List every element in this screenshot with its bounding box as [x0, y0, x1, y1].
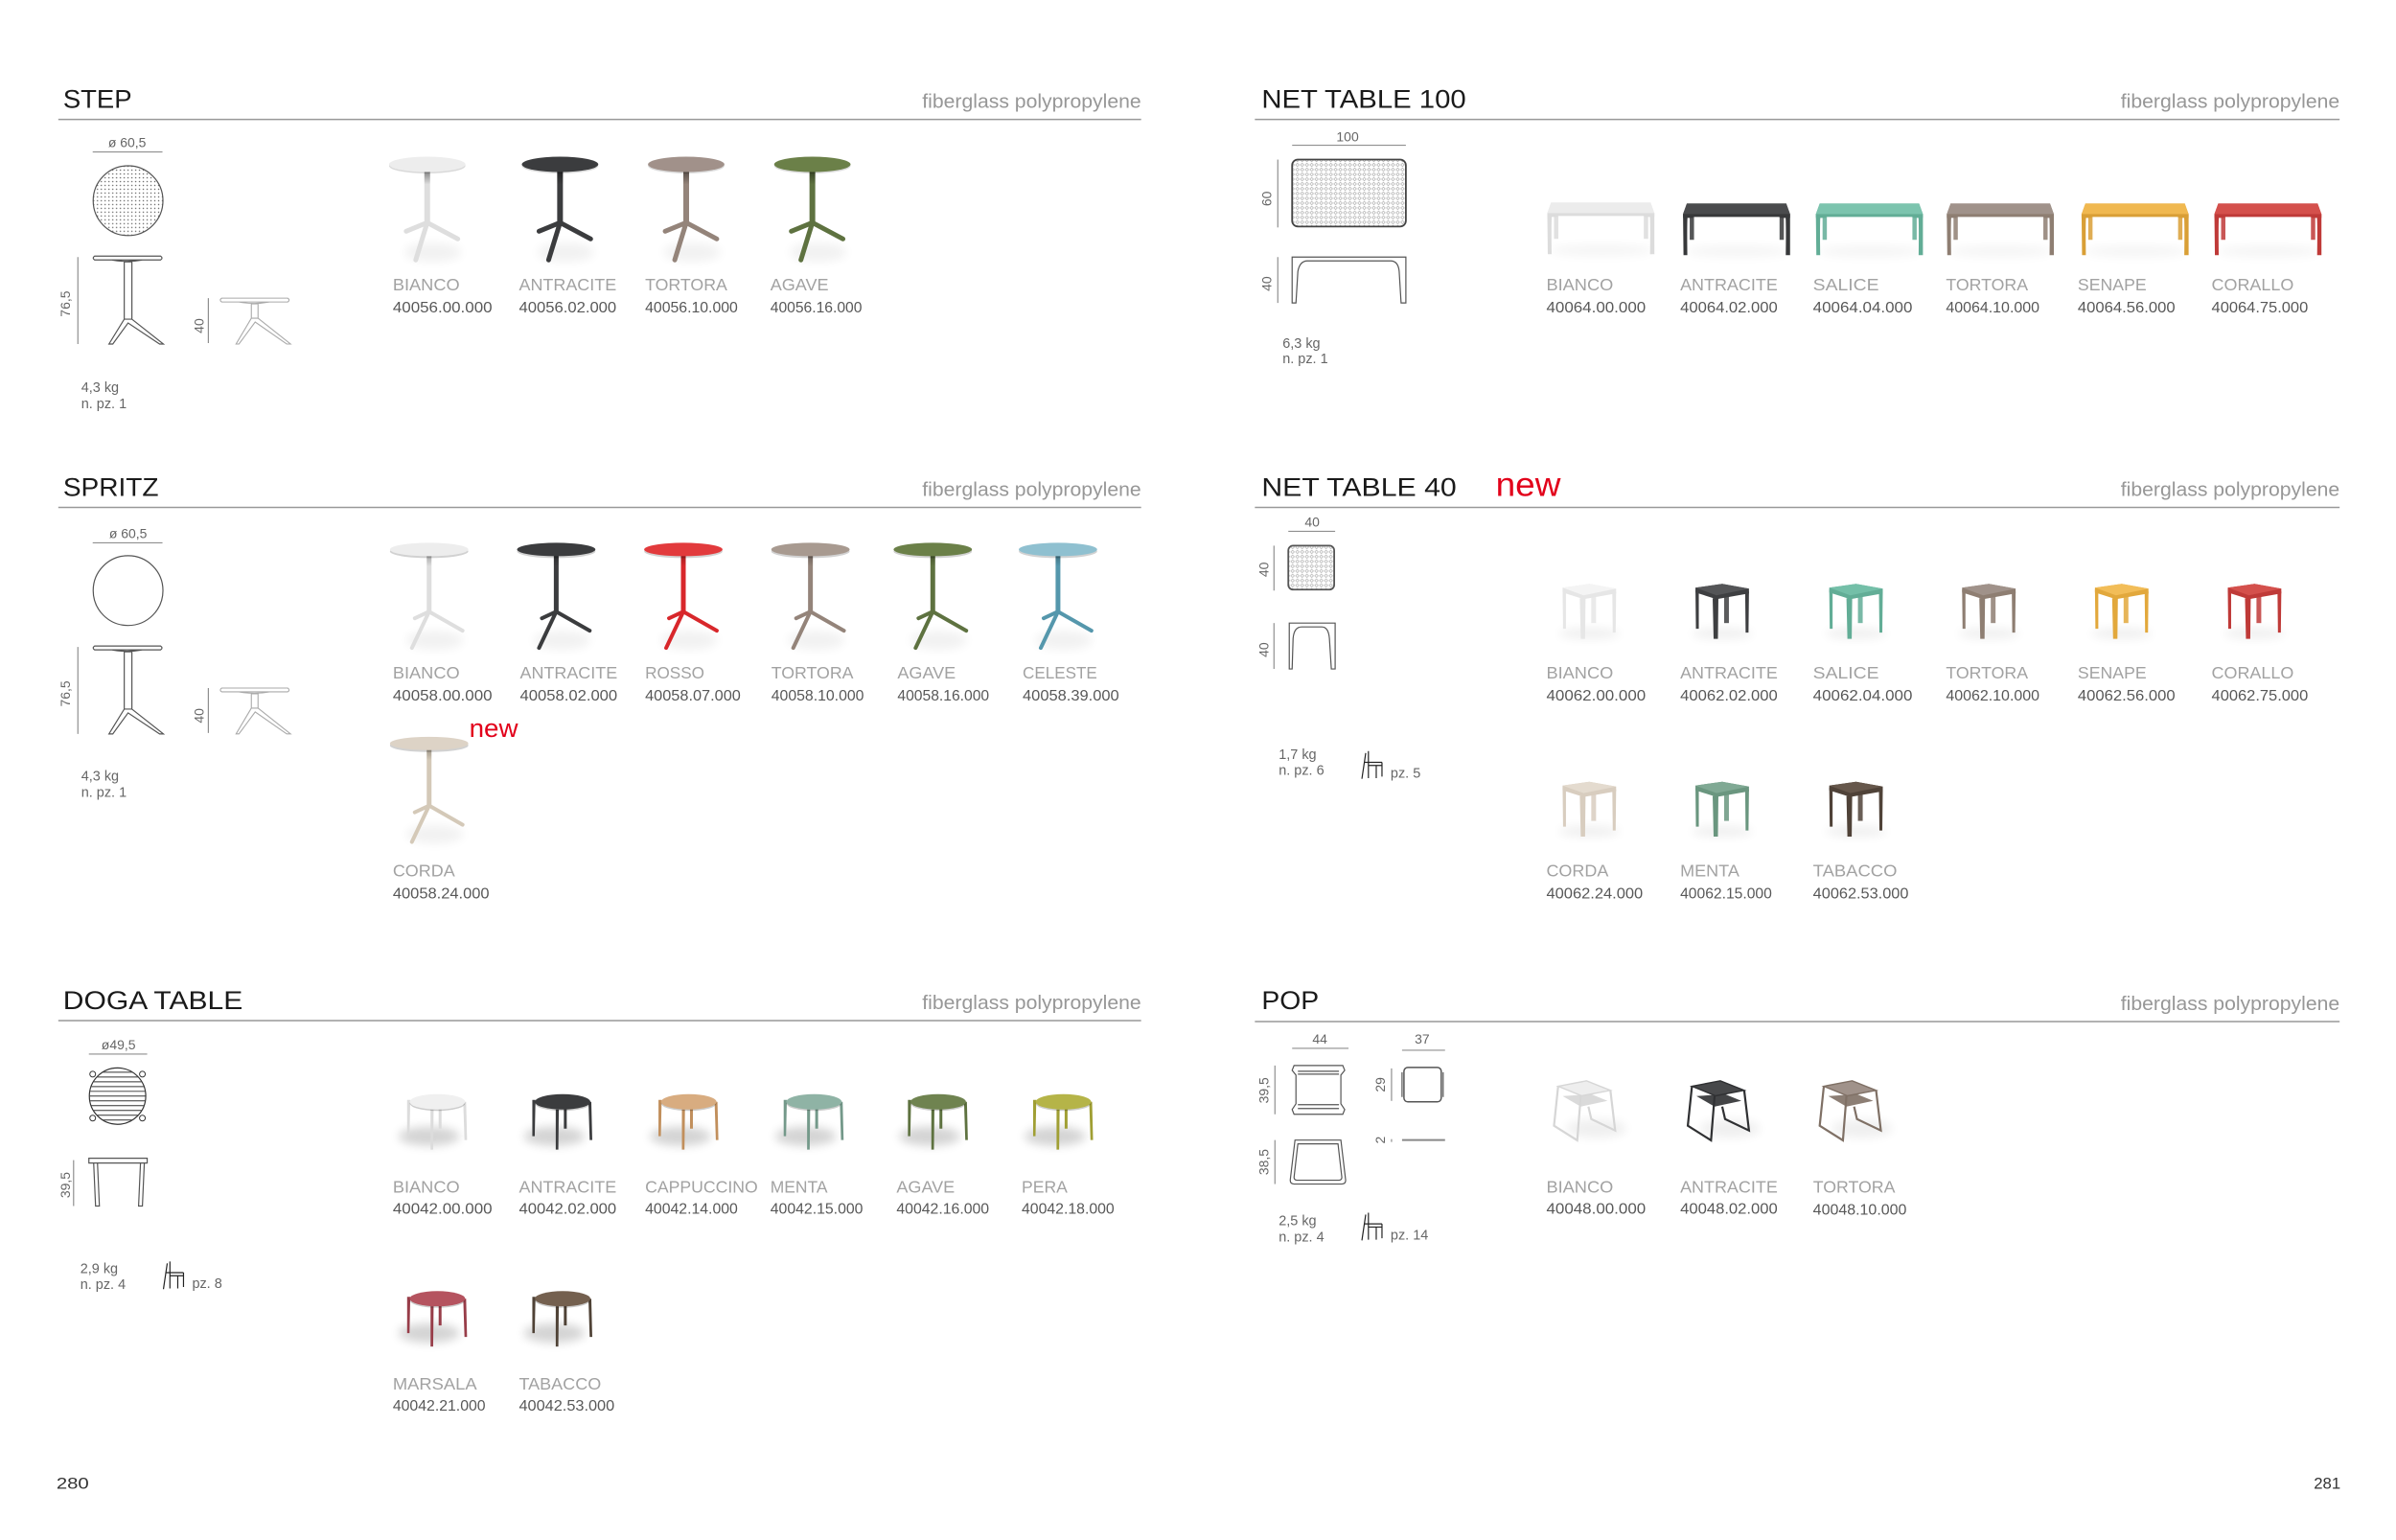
material: POP: fiberglass polypropylene — [2121, 994, 2339, 1015]
product: NET40 antracite: ANTRACITE — [1680, 663, 1778, 682]
heading: NET TABLE 100: NET TABLE 100 — [1261, 85, 1466, 114]
product: DOGA marsala — [393, 1291, 486, 1414]
material: NET TABLE 40: fiberglass polypropylene — [2121, 480, 2339, 501]
product: NET100 bianco: 40064.00.000 — [1546, 300, 1646, 316]
heading: NET TABLE 40: NET TABLE 40 — [1261, 473, 1457, 502]
product: SPRITZ celeste: 40058.39.000 — [1023, 688, 1119, 704]
product: NET100 tortora — [1946, 203, 2054, 316]
product: DOGA pera: 40042.18.000 — [1022, 1201, 1115, 1217]
product: SPRITZ agave: 40058.16.000 — [897, 688, 989, 704]
product: STEP tortora: TORTORA — [645, 275, 727, 294]
product: DOGA menta — [771, 1094, 863, 1217]
product: POP antracite: ANTRACITE — [1680, 1178, 1778, 1197]
technical drawings: SPRITZ: 40 — [191, 708, 206, 724]
product: SPRITZ corda: 40058.24.000 — [393, 885, 490, 902]
product: POP tortora: TORTORA — [1813, 1178, 1895, 1197]
technical drawings: POP: 38,5 — [1256, 1149, 1271, 1175]
weight info: DOGA TABLE: 2,9 kg — [81, 1261, 118, 1276]
product: SPRITZ bianco: BIANCO — [393, 663, 460, 682]
product: STEP tortora: 40056.10.000 — [645, 300, 738, 316]
product: NET40 corallo: 40062.75.000 — [2212, 688, 2308, 704]
technical drawings: SPRITZ: ø 60,5 — [109, 525, 148, 540]
product: SPRITZ antracite: ANTRACITE — [519, 663, 617, 682]
product: NET40 corda: CORDA — [1546, 861, 1608, 880]
product: DOGA antracite: ANTRACITE — [518, 1178, 616, 1197]
product: SPRITZ corda: CORDA — [393, 861, 455, 880]
technical drawings: STEP: ø 60,5 — [108, 135, 147, 150]
product: POP bianco — [1546, 1081, 1646, 1217]
product: SPRITZ antracite: 40058.02.000 — [519, 688, 617, 704]
product: SPRITZ agave: AGAVE — [897, 663, 956, 682]
product: NET40 senape: 40062.56.000 — [2078, 688, 2176, 704]
weight info: NET TABLE 40: 1,7 kg — [1279, 747, 1317, 763]
panel: DOGA TABLE — [58, 986, 1141, 1414]
product: SPRITZ rosso: ROSSO — [645, 663, 704, 682]
weight info: NET TABLE 100: n. pz. 1 — [1282, 352, 1328, 367]
product: NET100 corallo: 40064.75.000 — [2212, 300, 2308, 316]
technical drawings: NET TABLE 100: 100 — [1336, 129, 1359, 145]
weight info: STEP: n. pz. 1 — [81, 397, 127, 412]
product: DOGA cappuccino — [645, 1094, 758, 1217]
product: STEP antracite: ANTRACITE — [518, 275, 616, 294]
product: DOGA bianco — [393, 1094, 493, 1217]
stack count: POP: pz. 14 — [1391, 1228, 1428, 1243]
product: SPRITZ rosso: 40058.07.000 — [645, 688, 741, 704]
panel: SPRITZ — [58, 473, 1141, 902]
product: NET100 bianco: BIANCO — [1546, 275, 1613, 294]
product: NET40 bianco — [1546, 584, 1646, 704]
product: NET40 senape — [2078, 584, 2176, 704]
product: NET100 antracite: ANTRACITE — [1680, 275, 1778, 294]
product: NET40 salice — [1813, 584, 1912, 704]
heading: POP: POP — [1261, 986, 1319, 1015]
technical drawings: POP: 29 — [1372, 1077, 1388, 1092]
product: NET40 tabacco: TABACCO — [1813, 861, 1897, 880]
new tag: SPRITZ corda: new — [470, 714, 518, 743]
product: NET100 salice: 40064.04.000 — [1813, 300, 1912, 316]
product: NET40 tabacco: 40062.53.000 — [1813, 885, 1908, 902]
product: STEP bianco — [389, 157, 493, 316]
heading: DOGA TABLE: DOGA TABLE — [63, 986, 242, 1015]
product: DOGA menta: MENTA — [771, 1178, 828, 1197]
product: NET100 senape — [2078, 203, 2189, 316]
product: NET40 menta: MENTA — [1680, 861, 1739, 880]
technical drawings: DOGA TABLE: 39,5 — [58, 1172, 73, 1198]
product: DOGA tabacco — [518, 1291, 614, 1414]
technical drawings: SPRITZ: 76,5 — [58, 680, 73, 707]
weight info: SPRITZ: n. pz. 1 — [81, 786, 127, 801]
weight info: NET TABLE 40: n. pz. 6 — [1279, 764, 1325, 779]
page number: right: 281 — [2314, 1475, 2340, 1493]
stack icon: POP — [1362, 1212, 1382, 1240]
material: DOGA TABLE: fiberglass polypropylene — [922, 993, 1141, 1014]
product: SPRITZ celeste: CELESTE — [1023, 663, 1097, 682]
stack count: NET TABLE 40: pz. 5 — [1391, 767, 1420, 782]
technical drawings: NET TABLE 100: 40 — [1258, 276, 1274, 291]
heading: SPRITZ: SPRITZ — [63, 473, 159, 502]
product: STEP tortora — [645, 157, 738, 316]
product: STEP antracite: 40056.02.000 — [518, 300, 616, 316]
stack icon: DOGA TABLE — [164, 1261, 183, 1289]
product: DOGA tabacco: TABACCO — [518, 1374, 601, 1393]
product: SPRITZ tortora — [772, 542, 864, 704]
product: SPRITZ bianco: 40058.00.000 — [393, 688, 493, 704]
product: POP antracite: 40048.02.000 — [1680, 1201, 1778, 1217]
product: NET100 corallo — [2212, 203, 2321, 316]
product: NET100 antracite: 40064.02.000 — [1680, 300, 1778, 316]
product: NET100 bianco — [1546, 202, 1654, 316]
technical drawings: STEP: 76,5 — [58, 290, 73, 317]
product: DOGA cappuccino: CAPPUCCINO — [645, 1178, 758, 1197]
product: STEP antracite — [518, 157, 616, 316]
product: DOGA pera: PERA — [1022, 1178, 1068, 1197]
product: NET40 corallo — [2212, 584, 2308, 704]
product: POP bianco: 40048.00.000 — [1546, 1201, 1646, 1217]
technical drawings: NET TABLE 40: 40 — [1256, 562, 1271, 577]
product: NET40 menta — [1680, 782, 1772, 902]
product: DOGA pera — [1022, 1094, 1115, 1217]
product: STEP bianco: BIANCO — [393, 275, 460, 294]
product: DOGA cappuccino: 40042.14.000 — [645, 1201, 738, 1217]
product: NET100 tortora: TORTORA — [1946, 275, 2028, 294]
product: DOGA agave: AGAVE — [896, 1178, 955, 1197]
product: SPRITZ celeste — [1019, 542, 1119, 704]
technical drawings: NET TABLE 40 — [1256, 514, 1335, 669]
technical drawings: NET TABLE 40: 40 — [1304, 514, 1320, 529]
product: NET40 bianco: BIANCO — [1546, 663, 1613, 682]
product: POP antracite — [1680, 1081, 1778, 1217]
stack count: DOGA TABLE: pz. 8 — [192, 1276, 222, 1292]
product: NET100 senape: SENAPE — [2078, 275, 2147, 294]
weight info: POP: n. pz. 4 — [1279, 1230, 1325, 1245]
product: DOGA bianco: BIANCO — [393, 1178, 460, 1197]
panel: NET TABLE 40 — [1255, 467, 2339, 902]
product: SPRITZ antracite — [517, 542, 617, 704]
technical drawings: STEP: 40 — [191, 318, 206, 333]
technical drawings: POP: 2 — [1372, 1137, 1388, 1144]
technical drawings: NET TABLE 100: 60 — [1258, 191, 1274, 206]
product: DOGA tabacco: 40042.53.000 — [518, 1398, 614, 1414]
panel: POP — [1255, 986, 2339, 1245]
product: DOGA marsala: MARSALA — [393, 1374, 477, 1393]
technical drawings: DOGA TABLE — [58, 1037, 148, 1206]
product: NET40 senape: SENAPE — [2078, 663, 2147, 682]
product: NET40 menta: 40062.15.000 — [1680, 885, 1772, 902]
product: NET40 corallo: CORALLO — [2212, 663, 2293, 682]
product: NET100 salice: SALICE — [1813, 275, 1879, 294]
stack icon: NET TABLE 40 — [1362, 751, 1382, 779]
product: NET40 tortora: TORTORA — [1946, 663, 2028, 682]
product: NET40 corda: 40062.24.000 — [1546, 885, 1643, 902]
technical drawings: POP — [1256, 1031, 1445, 1184]
material: NET TABLE 100: fiberglass polypropylene — [2121, 92, 2339, 113]
product: DOGA menta: 40042.15.000 — [771, 1201, 863, 1217]
new tag: NET TABLE 40: new — [1496, 467, 1561, 504]
product: NET100 corallo: CORALLO — [2212, 275, 2293, 294]
page number: left: 280 — [57, 1475, 89, 1493]
product: DOGA marsala: 40042.21.000 — [393, 1398, 486, 1414]
product: SPRITZ bianco — [390, 542, 493, 704]
product: DOGA antracite — [518, 1094, 616, 1217]
product: STEP agave: AGAVE — [771, 275, 829, 294]
product: NET40 salice: 40062.04.000 — [1813, 688, 1912, 704]
product: NET40 salice: SALICE — [1813, 663, 1879, 682]
product: STEP bianco: 40056.00.000 — [393, 300, 493, 316]
product: POP bianco: BIANCO — [1546, 1178, 1613, 1197]
heading: STEP: STEP — [63, 85, 132, 114]
technical drawings: SPRITZ — [58, 525, 290, 734]
product: NET100 tortora: 40064.10.000 — [1946, 300, 2039, 316]
product: STEP agave: 40056.16.000 — [771, 300, 862, 316]
weight info: POP: 2,5 kg — [1279, 1213, 1317, 1229]
product: SPRITZ tortora: 40058.10.000 — [772, 688, 864, 704]
technical drawings: NET TABLE 100 — [1258, 129, 1406, 303]
product: NET100 antracite — [1680, 203, 1790, 316]
product: SPRITZ rosso — [644, 542, 741, 704]
product: DOGA agave — [896, 1094, 989, 1217]
product: NET100 senape: 40064.56.000 — [2078, 300, 2176, 316]
product: DOGA bianco: 40042.00.000 — [393, 1201, 493, 1217]
weight info: NET TABLE 100: 6,3 kg — [1282, 336, 1321, 352]
product: DOGA antracite: 40042.02.000 — [518, 1201, 616, 1217]
product: NET40 tortora — [1946, 584, 2039, 704]
technical drawings: POP: 44 — [1312, 1031, 1327, 1046]
product: NET40 antracite — [1680, 584, 1778, 704]
panel: NET TABLE 100 — [1255, 85, 2339, 367]
product: DOGA agave: 40042.16.000 — [896, 1201, 989, 1217]
weight info: SPRITZ: 4,3 kg — [81, 770, 119, 785]
product: NET40 tortora: 40062.10.000 — [1946, 688, 2039, 704]
product: NET100 salice — [1813, 203, 1923, 316]
product: SPRITZ tortora: TORTORA — [772, 663, 854, 682]
product: NET40 antracite: 40062.02.000 — [1680, 688, 1778, 704]
technical drawings: POP: 39,5 — [1256, 1077, 1271, 1103]
weight info: STEP: 4,3 kg — [81, 380, 119, 396]
product: SPRITZ agave — [893, 542, 989, 704]
technical drawings: POP: 37 — [1415, 1031, 1430, 1046]
product: POP tortora: 40048.10.000 — [1813, 1202, 1906, 1218]
product: SPRITZ corda — [390, 737, 490, 902]
panel: STEP — [58, 85, 1141, 412]
technical drawings: NET TABLE 40: 40 — [1256, 642, 1271, 657]
product: NET40 corda — [1546, 782, 1643, 902]
product: POP tortora — [1813, 1081, 1906, 1218]
product: NET40 tabacco — [1813, 782, 1908, 902]
material: SPRITZ: fiberglass polypropylene — [922, 480, 1141, 501]
product: NET40 bianco: 40062.00.000 — [1546, 688, 1646, 704]
technical drawings: STEP — [58, 135, 290, 344]
weight info: DOGA TABLE: n. pz. 4 — [81, 1277, 126, 1293]
product: STEP agave — [771, 157, 862, 316]
material: STEP: fiberglass polypropylene — [922, 92, 1141, 113]
technical drawings: DOGA TABLE: ø49,5 — [102, 1037, 136, 1052]
